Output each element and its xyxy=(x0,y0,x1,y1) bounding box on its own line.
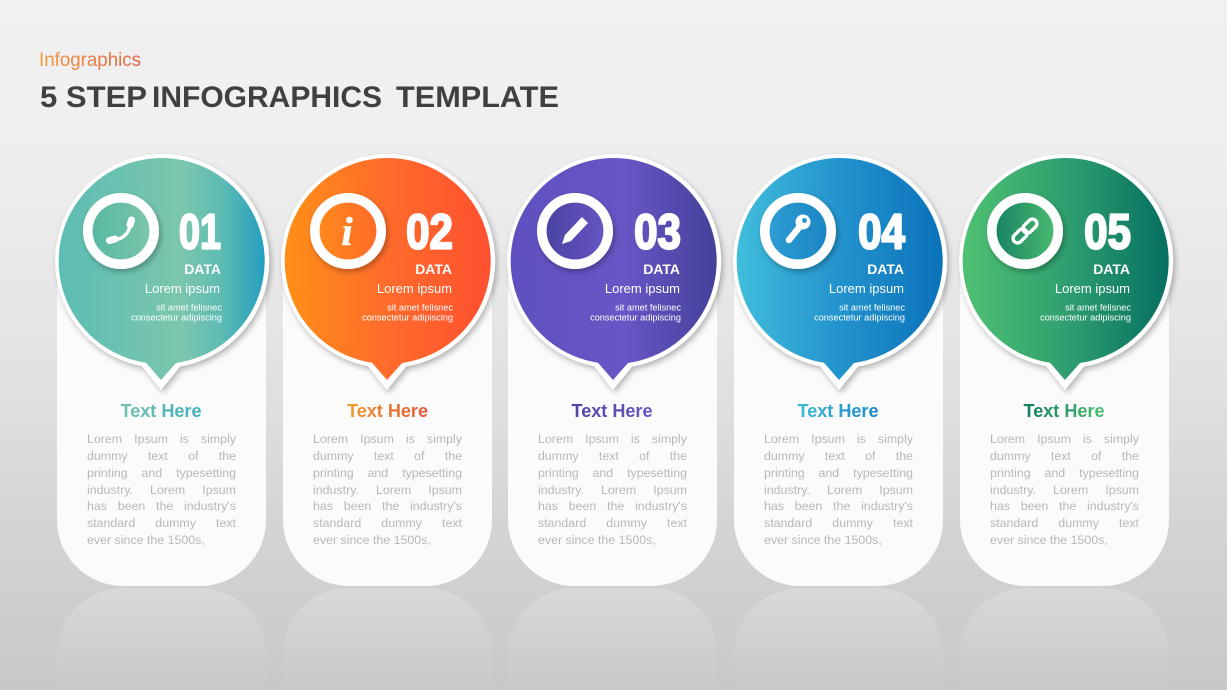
body text: dummy text of the xyxy=(990,449,1139,463)
speech bubble xyxy=(733,154,947,390)
subtitle: Lorem ipsum xyxy=(605,281,680,296)
subtitle: Lorem ipsum xyxy=(377,281,452,296)
title: TEMPLATE xyxy=(396,81,559,114)
body text: standard dummy text xyxy=(87,516,236,530)
body text: ever since the 1500s, xyxy=(990,533,1108,547)
body text: industry. Lorem Ipsum xyxy=(87,483,236,497)
caption xyxy=(814,302,905,322)
body text: dummy text of the xyxy=(313,449,462,463)
title: INFOGRAPHICS xyxy=(152,81,382,114)
body text: has been the industry's xyxy=(990,499,1139,513)
body text: has been the industry's xyxy=(87,499,236,513)
caption: sit amet felisnec xyxy=(156,302,222,312)
body text: ever since the 1500s, xyxy=(538,533,656,547)
panel: card 3 background xyxy=(508,270,717,586)
title xyxy=(40,81,559,114)
body text: Lorem Ipsum is simply xyxy=(538,432,687,446)
number: 05 xyxy=(1084,205,1131,259)
caption: consectetur adipiscing xyxy=(1040,312,1131,322)
data label: DATA xyxy=(184,261,221,277)
panel: step 3 xyxy=(506,154,726,547)
body text: printing and typesetting xyxy=(990,466,1139,480)
reflection: card 3 xyxy=(508,588,717,690)
body text: Lorem Ipsum is simply xyxy=(313,432,462,446)
panel: card 4 background xyxy=(734,270,943,586)
body text: printing and typesetting xyxy=(313,466,462,480)
panel: card 5 background xyxy=(960,270,1169,586)
body text: industry. Lorem Ipsum xyxy=(990,483,1139,497)
body text: has been the industry's xyxy=(764,499,913,513)
body text: standard dummy text xyxy=(990,516,1139,530)
panel: step 5 xyxy=(958,154,1178,547)
icon: chain link xyxy=(992,198,1058,264)
caption: consectetur adipiscing xyxy=(814,312,905,322)
body text: standard dummy text xyxy=(538,516,687,530)
speech bubble xyxy=(281,154,495,390)
heading: Text Here xyxy=(798,401,878,421)
caption: consectetur adipiscing xyxy=(362,312,453,322)
number: 04 xyxy=(858,205,906,259)
number: 02 xyxy=(406,205,453,259)
heading: Text Here xyxy=(120,401,202,421)
speech bubble xyxy=(507,154,721,390)
body text: standard dummy text xyxy=(313,516,462,530)
body text: dummy text of the xyxy=(87,449,236,463)
subtitle: Lorem ipsum xyxy=(1055,281,1130,296)
body text xyxy=(87,432,236,547)
caption: sit amet felisnec xyxy=(387,302,453,312)
caption: consectetur adipiscing xyxy=(131,312,222,322)
icon: key xyxy=(765,198,831,264)
data label: DATA xyxy=(643,261,680,277)
title: 5 STEP xyxy=(40,81,147,114)
data label: DATA xyxy=(415,261,452,277)
body text: dummy text of the xyxy=(538,449,687,463)
number: 01 xyxy=(179,205,221,260)
body text: printing and typesetting xyxy=(764,466,913,480)
body text xyxy=(313,432,462,547)
panel: step 4 xyxy=(732,154,952,547)
number: 03 xyxy=(634,205,681,259)
caption xyxy=(1040,302,1131,322)
subtitle: Lorem ipsum xyxy=(829,281,904,296)
speech bubble xyxy=(959,154,1173,390)
panel: step 1 xyxy=(54,154,274,547)
caption xyxy=(590,302,681,322)
icon: pencil xyxy=(542,198,608,264)
body text: ever since the 1500s, xyxy=(764,533,882,547)
reflection: card 1 xyxy=(57,588,266,690)
caption: consectetur adipiscing xyxy=(590,312,681,322)
speech bubble xyxy=(55,154,269,390)
caption: sit amet felisnec xyxy=(1065,302,1131,312)
icon: phone xyxy=(88,198,154,264)
data label: DATA xyxy=(867,261,904,277)
body text: has been the industry's xyxy=(313,499,462,513)
panel: step 2 xyxy=(280,154,500,547)
panel: card 1 background xyxy=(57,270,266,586)
body text: standard dummy text xyxy=(764,516,913,530)
reflection: card 2 xyxy=(283,588,492,690)
body text: has been the industry's xyxy=(538,499,687,513)
body text: printing and typesetting xyxy=(538,466,687,480)
icon: info: i xyxy=(341,209,353,254)
heading: Text Here xyxy=(572,401,652,421)
body text: Lorem Ipsum is simply xyxy=(764,432,913,446)
eyebrow: Infographics: Infographics xyxy=(39,50,141,71)
subtitle: Lorem ipsum xyxy=(145,281,220,296)
body text: industry. Lorem Ipsum xyxy=(764,483,913,497)
caption xyxy=(131,302,222,322)
heading: Text Here xyxy=(347,401,428,421)
icon: info xyxy=(315,198,381,264)
body text xyxy=(538,432,687,547)
body text: industry. Lorem Ipsum xyxy=(538,483,687,497)
heading: Text Here xyxy=(1024,401,1104,421)
reflection: card 5 xyxy=(960,588,1169,690)
body text: ever since the 1500s, xyxy=(87,533,205,547)
caption: sit amet felisnec xyxy=(839,302,905,312)
panel: card 2 background xyxy=(283,270,492,586)
body text xyxy=(764,432,913,547)
body text: ever since the 1500s, xyxy=(313,533,431,547)
caption xyxy=(362,302,453,322)
header xyxy=(39,50,559,114)
body text xyxy=(990,432,1139,547)
reflection: card 4 xyxy=(734,588,943,690)
data label: DATA xyxy=(1093,261,1130,277)
caption: sit amet felisnec xyxy=(615,302,681,312)
body text: dummy text of the xyxy=(764,449,913,463)
body text: Lorem Ipsum is simply xyxy=(990,432,1139,446)
body text: printing and typesetting xyxy=(87,466,236,480)
body text: Lorem Ipsum is simply xyxy=(87,432,236,446)
body text: industry. Lorem Ipsum xyxy=(313,483,462,497)
